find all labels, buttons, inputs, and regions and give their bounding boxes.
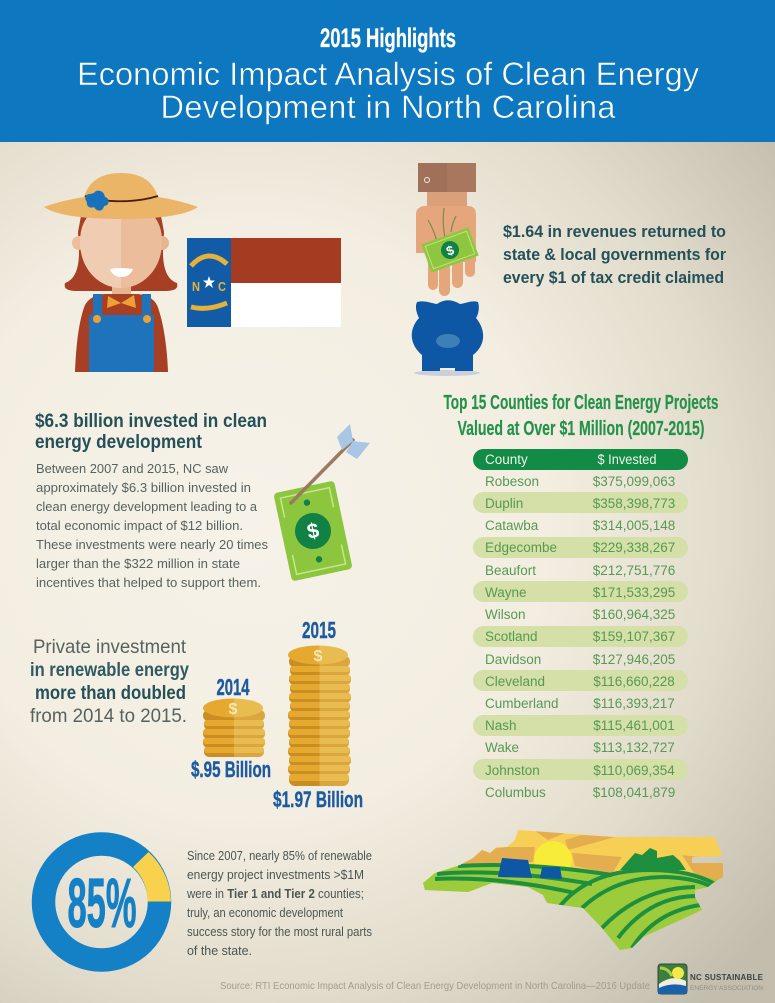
table: top 15 counties: Davidson (485, 652, 541, 667)
icon: dollar bill: $ (444, 242, 457, 259)
text: private investment: Private investment (33, 636, 187, 658)
icon: money with arrow: $ (305, 519, 322, 544)
table: top 15 counties: $212,751,776 (593, 563, 675, 578)
text: tier counties: Since 2007, nearly 85% of renewable (187, 848, 372, 863)
text: private investment: from 2014 to 2015. (30, 705, 187, 727)
table: top 15 counties: Duplin (485, 496, 523, 511)
table: top 15 counties: Edgecombe (485, 540, 557, 555)
table: top 15 counties: Cleveland (485, 674, 545, 689)
text: $6.3 billion invested (35, 411, 268, 590)
table: top 15 counties: Johnston (485, 763, 540, 778)
paragraph: These investments were nearly 20 times (36, 537, 268, 552)
table: top 15 counties: $115,461,001 (593, 718, 675, 733)
text: tier counties (186, 848, 372, 958)
table: top 15 counties: Cumberland (485, 696, 559, 711)
table: top 15 counties: Robeson (485, 474, 539, 489)
text: private investment (30, 636, 189, 727)
table: top 15 counties: Wilson (485, 607, 526, 622)
heading: 2015 Highlights: 2015 Highlights (320, 23, 456, 53)
icon: North Carolina flag: N (192, 279, 200, 294)
logo: NC Sustainable Energy Association: ENERGY ASSOCIATION (690, 985, 763, 992)
heading: energy development (35, 432, 203, 453)
logo: NC Sustainable Energy Association: NC SUSTAINABLE (690, 973, 764, 982)
text: tax credit callout: $1.64 in revenues returned to (503, 223, 726, 241)
text: tax credit callout: state & local governments for (503, 246, 727, 264)
text: tier counties: were in Tier 1 and Tier 2 counties; (186, 886, 364, 901)
chart: 85% donut (44, 844, 171, 960)
table: top 15 counties: Nash (485, 718, 517, 733)
value: $.95 Billion: $.95 Billion (191, 757, 271, 782)
paragraph: total economic impact of $12 billion. (36, 518, 243, 533)
icon: hand dropping money (416, 163, 479, 296)
table: top 15 counties: $127,946,205 (593, 652, 675, 667)
logo: NC Sustainable Energy Association (658, 964, 764, 994)
title (77, 56, 700, 125)
table: top 15 counties: $229,338,267 (593, 540, 675, 555)
table header (473, 449, 688, 470)
paragraph: incentives that helped to support them. (36, 575, 261, 590)
chart label: 2015: 2015 (302, 617, 336, 643)
text: tier counties: energy project investments >$1M (187, 867, 364, 882)
text: tier counties: truly, an economic development (187, 905, 343, 920)
table header: County (485, 452, 528, 467)
table: top 15 counties: $116,660,228 (593, 674, 675, 689)
icon: piggy bank (412, 300, 483, 376)
table: top 15 counties: $358,398,773 (593, 496, 675, 511)
icon: money with arrow (273, 424, 370, 581)
icon: North Carolina flag (187, 238, 341, 327)
icon: coin stack 2015: $ (314, 648, 323, 665)
table: top 15 counties: Catawba (485, 518, 539, 533)
table: top 15 counties (473, 449, 688, 800)
text: tier counties: success story for the most rural parts (187, 924, 372, 939)
text: private investment: more than doubled (35, 682, 186, 704)
chart: 85% donut: 85% (68, 864, 136, 942)
table: top 15 counties: $108,041,879 (593, 785, 675, 800)
table header: $ Invested (598, 452, 656, 467)
paragraph: approximately $6.3 billion invested in (36, 480, 251, 495)
table: top 15 counties: $171,533,295 (593, 585, 675, 600)
table: top 15 counties: $375,099,063 (593, 474, 675, 489)
paragraph: clean energy development leading to a (36, 499, 258, 514)
icon: North Carolina flag: C (218, 279, 227, 294)
table: top 15 counties: $160,964,325 (593, 607, 675, 622)
source line: Source: RTI Economic Impact Analysis of Clean Energy Development in North Carolina—2016 Update (220, 980, 650, 992)
table: top 15 counties: Scotland (485, 629, 538, 644)
icon: farmer woman (44, 173, 198, 372)
text: tax credit callout (503, 223, 727, 287)
icon: coin stack 2014 (203, 698, 265, 757)
paragraph (36, 461, 268, 590)
title: Development in North Carolina (160, 89, 616, 125)
paragraph: larger than the $322 million in state (36, 556, 240, 571)
table: top 15 counties: $314,005,148 (593, 518, 675, 533)
table: top 15 counties: Beaufort (485, 563, 536, 578)
text: tax credit callout: every $1 of tax credit claimed (503, 269, 724, 287)
table: top 15 counties: $113,132,727 (593, 740, 675, 755)
table: top 15 counties: Wayne (485, 585, 527, 600)
heading (35, 411, 267, 453)
table: top 15 counties: $110,069,354 (593, 763, 675, 778)
icon: coin stack 2015 (288, 646, 351, 786)
paragraph: Between 2007 and 2015, NC saw (36, 461, 229, 476)
header banner (0, 0, 775, 142)
text: tier counties: of the state. (187, 943, 252, 958)
map: North Carolina landscape (423, 830, 723, 950)
text: private investment: in renewable energy (30, 659, 189, 681)
table: top 15 counties: Wake (485, 740, 519, 755)
table: top 15 counties: $159,107,367 (593, 629, 675, 644)
icon: coin stack 2014: $ (229, 701, 238, 718)
table heading (444, 392, 718, 440)
title: Economic Impact Analysis of Clean Energy (77, 56, 700, 92)
table: top 15 counties: $116,393,217 (593, 696, 675, 711)
table: top 15 counties: Columbus (485, 785, 546, 800)
value: $1.97 Billion: $1.97 Billion (273, 787, 363, 812)
chart label: 2014: 2014 (216, 674, 250, 700)
heading: $6.3 billion invested in clean (35, 411, 267, 432)
